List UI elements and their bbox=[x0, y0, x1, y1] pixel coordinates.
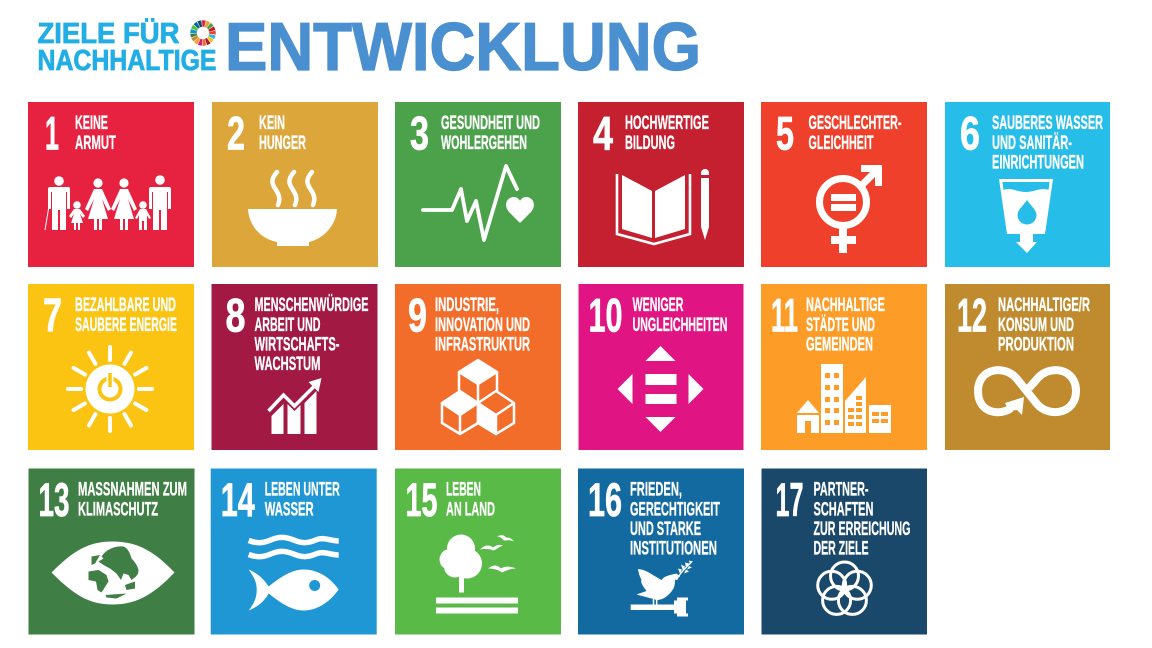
label: goal 12: NACHHALTIGE/R bbox=[998, 295, 1090, 316]
label: goal 12 bbox=[998, 295, 1090, 356]
label: goal 11 bbox=[806, 295, 885, 356]
icon: family bbox=[45, 175, 171, 230]
number 2: 2 bbox=[227, 106, 245, 160]
icon: infinity loop bbox=[978, 370, 1076, 415]
header: title bbox=[38, 9, 701, 85]
label: goal 17 bbox=[814, 480, 910, 560]
icon: gender equality bbox=[820, 165, 882, 253]
label: goal 10: UNGLEICHHEITEN bbox=[632, 315, 728, 336]
number 14: 14 bbox=[221, 473, 255, 526]
label: goal 8: WACHSTUM bbox=[254, 354, 320, 375]
number 12: 12 bbox=[957, 288, 987, 342]
title: small two-line part: ZIELE FÜR bbox=[38, 17, 180, 50]
icon: reduced inequality arrows bbox=[618, 346, 704, 432]
number 10: 10 bbox=[588, 288, 622, 342]
panel: goal 14 bbox=[211, 468, 377, 634]
label: goal 17: ZUR ERREICHUNG bbox=[814, 519, 910, 540]
title: small two-line part bbox=[38, 17, 216, 77]
label: goal 7: BEZAHLBARE UND bbox=[75, 295, 176, 316]
label: goal 1 bbox=[75, 113, 116, 154]
label: goal 17: PARTNER- bbox=[814, 480, 868, 500]
label: goal 6: EINRICHTUNGEN bbox=[992, 152, 1084, 174]
label: goal 13 bbox=[78, 480, 187, 520]
icon: interlocking rings bbox=[818, 562, 871, 614]
label: goal 9 bbox=[435, 295, 530, 356]
label: goal 10: WENIGER bbox=[632, 295, 684, 316]
icon: soup bowl bbox=[248, 172, 337, 246]
label: goal 3: WOHLERGEHEN bbox=[441, 133, 527, 154]
number 5: 5 bbox=[776, 106, 794, 160]
label: goal 14: LEBEN UNTER bbox=[265, 480, 340, 500]
label: goal 15: LEBEN bbox=[446, 480, 481, 500]
icon: growth chart bbox=[268, 378, 322, 434]
panel: goal 5 bbox=[761, 102, 927, 267]
icon: waves and fish bbox=[249, 537, 339, 610]
label: goal 4: BILDUNG bbox=[625, 133, 675, 154]
label: goal 5: GLEICHHEIT bbox=[808, 133, 874, 154]
panel: goal 15 bbox=[395, 468, 561, 634]
panel: goal 11 bbox=[761, 284, 927, 450]
label: goal 2: HUNGER bbox=[259, 133, 306, 154]
label: goal 3 bbox=[441, 113, 540, 154]
label: goal 6: UND SANITÄR- bbox=[992, 133, 1072, 154]
number 9: 9 bbox=[408, 288, 427, 342]
icon: dove and gavel bbox=[631, 560, 693, 616]
label: goal 4 bbox=[625, 113, 709, 154]
number 17: 17 bbox=[776, 473, 804, 526]
label: goal 9: INFRASTRUKTUR bbox=[435, 334, 530, 356]
label: goal 7 bbox=[75, 295, 177, 336]
icon: eye with globe bbox=[52, 542, 174, 604]
icon: tree and birds bbox=[436, 534, 518, 614]
label: goal 12: PRODUKTION bbox=[998, 334, 1074, 356]
icon: sun with power button bbox=[68, 347, 152, 431]
label: goal 17: DER ZIELE bbox=[814, 538, 868, 560]
label: goal 6 bbox=[992, 113, 1103, 174]
icon: SDG colour wheel bbox=[193, 23, 213, 43]
label: goal 13: MASSNAHMEN ZUM bbox=[78, 480, 187, 500]
panel: goal 13 bbox=[28, 468, 194, 634]
panel: goal 6 bbox=[945, 102, 1110, 267]
panel: goal 17 bbox=[762, 468, 927, 634]
number 11: 11 bbox=[771, 288, 798, 342]
label: goal 16: INSTITUTIONEN bbox=[630, 538, 717, 560]
label: goal 5: GESCHLECHTER- bbox=[808, 113, 902, 134]
label: goal 5 bbox=[808, 113, 902, 154]
label: goal 15: AN LAND bbox=[446, 500, 495, 520]
number 16: 16 bbox=[588, 473, 622, 526]
panel: goal 10 bbox=[578, 284, 744, 450]
panel: goal 9 bbox=[395, 284, 561, 450]
icon: water glass bbox=[999, 179, 1053, 253]
number 6: 6 bbox=[960, 106, 980, 160]
number 3: 3 bbox=[410, 106, 429, 160]
label: goal 11: STÄDTE UND bbox=[806, 315, 875, 336]
label: goal 16: FRIEDEN, bbox=[630, 480, 682, 500]
label: goal 11: GEMEINDEN bbox=[806, 334, 873, 356]
label: goal 12: KONSUM UND bbox=[998, 315, 1074, 336]
number 13: 13 bbox=[38, 473, 70, 526]
number 4: 4 bbox=[593, 106, 613, 160]
icon: heartbeat bbox=[423, 166, 534, 240]
number 7: 7 bbox=[43, 288, 62, 342]
number 1: 1 bbox=[45, 106, 59, 160]
label: goal 8: MENSCHENWÜRDIGE bbox=[254, 295, 368, 316]
label: goal 8: ARBEIT UND bbox=[254, 315, 320, 336]
label: goal 14: WASSER bbox=[265, 500, 314, 520]
icon: city buildings bbox=[797, 364, 891, 433]
label: goal 8: WIRTSCHAFTS- bbox=[254, 334, 340, 356]
label: goal 14 bbox=[265, 480, 340, 520]
number 8: 8 bbox=[226, 288, 246, 342]
panel: goal 1 bbox=[28, 102, 194, 267]
label: goal 3: GESUNDHEIT UND bbox=[441, 113, 540, 134]
label: goal 1: KEINE bbox=[75, 113, 108, 134]
label: goal 16: UND STARKE bbox=[630, 519, 701, 540]
label: goal 11: NACHHALTIGE bbox=[806, 295, 885, 316]
label: goal 2 bbox=[259, 113, 306, 154]
panel: goal 16 bbox=[578, 468, 744, 634]
label: goal 9: INNOVATION UND bbox=[435, 315, 530, 336]
panel: goal 12 bbox=[945, 284, 1110, 450]
title: small two-line part: NACHHALTIGE bbox=[38, 45, 216, 77]
label: goal 16: GERECHTIGKEIT bbox=[630, 500, 720, 520]
panel: goal 8 bbox=[212, 284, 378, 450]
panel: goal 3 bbox=[395, 102, 561, 267]
label: goal 7: SAUBERE ENERGIE bbox=[75, 315, 177, 336]
label: goal 8 bbox=[254, 295, 368, 375]
label: goal 9: INDUSTRIE, bbox=[435, 295, 499, 316]
label: goal 1: ARMUT bbox=[75, 133, 116, 154]
label: goal 17: SCHAFTEN bbox=[814, 500, 874, 520]
label: goal 15 bbox=[446, 480, 495, 520]
number 15: 15 bbox=[406, 473, 438, 526]
label: goal 4: HOCHWERTIGE bbox=[625, 113, 709, 134]
label: goal 16 bbox=[630, 480, 720, 560]
panel: goal 4 bbox=[578, 102, 744, 267]
label: goal 13: KLIMASCHUTZ bbox=[78, 500, 158, 520]
panel: goal 7 bbox=[28, 284, 194, 450]
label: goal 10 bbox=[632, 295, 728, 336]
panel: goal 2 bbox=[212, 102, 378, 267]
icon: book and pencil bbox=[617, 169, 709, 244]
label: goal 2: KEIN bbox=[259, 113, 285, 134]
icon: stacked cubes bbox=[442, 360, 514, 434]
title: large word: ENTWICKLUNG bbox=[225, 9, 701, 85]
